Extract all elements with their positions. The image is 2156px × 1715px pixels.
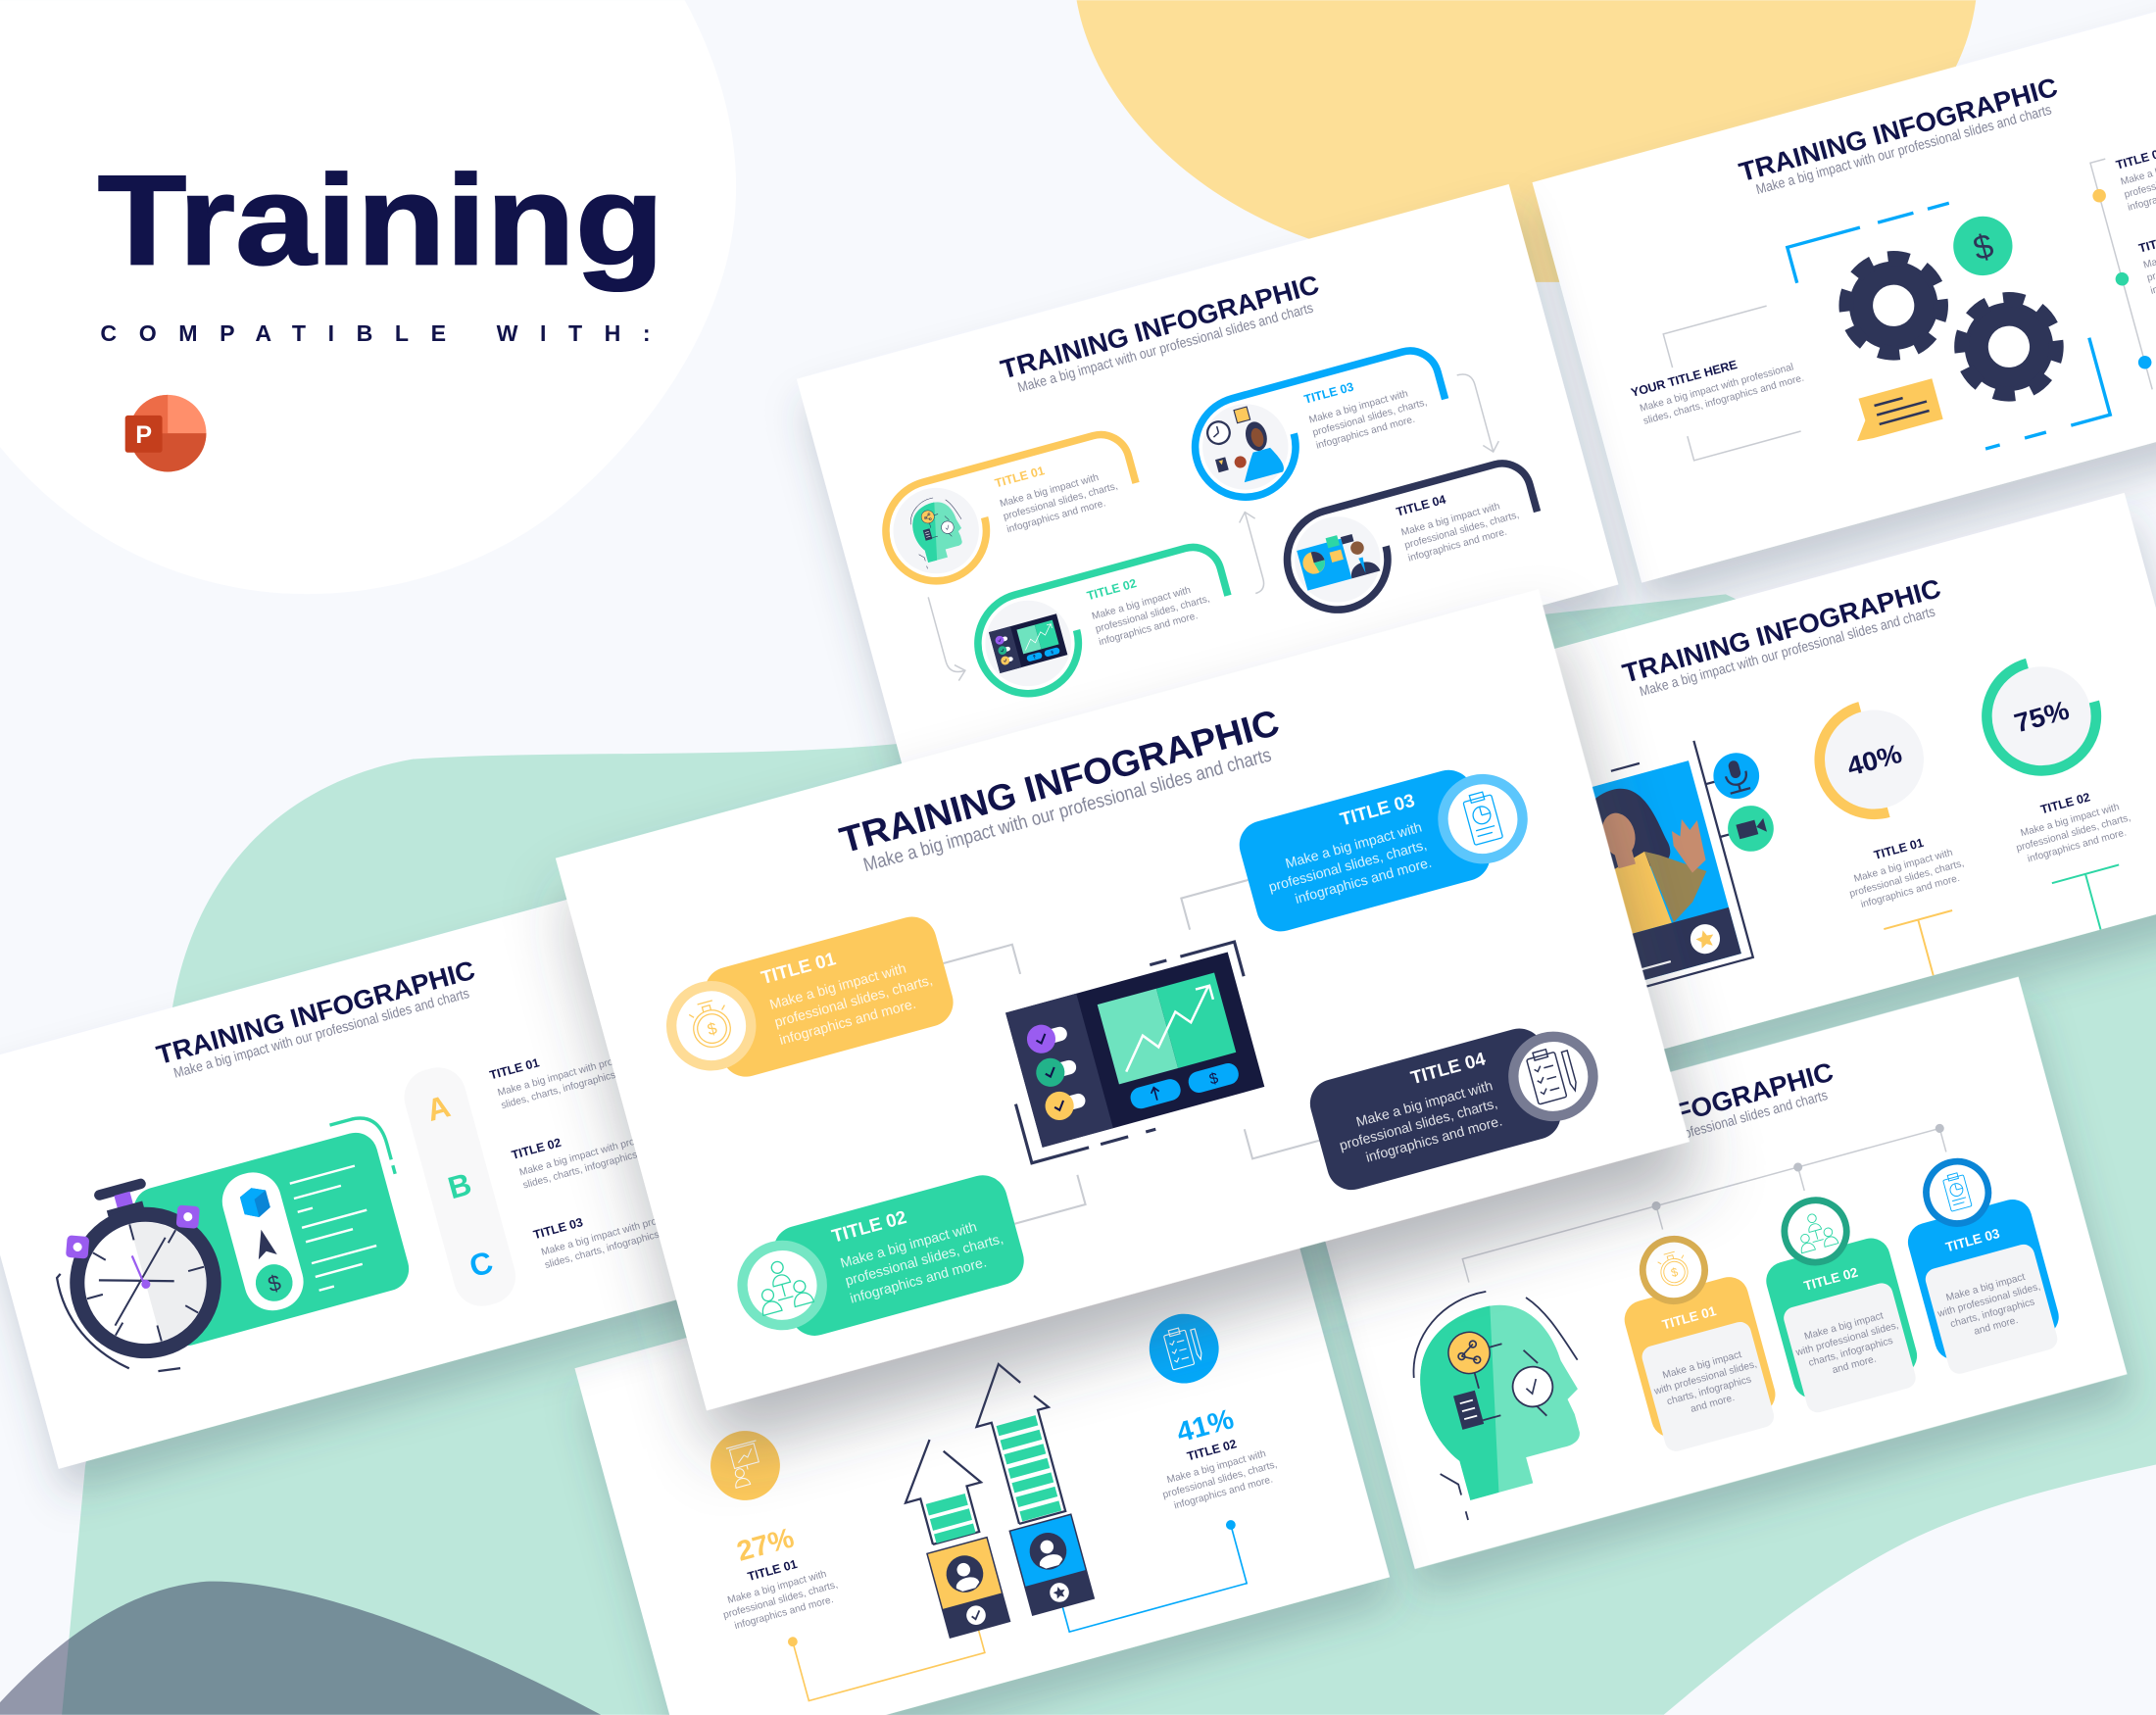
card: title 02: TITLE 02 [1802,1265,1859,1294]
text: title 02: infographics and more. [1173,1474,1274,1511]
slide title: TRAINING INFOGRAPHIC [1736,72,2061,187]
blob: slate overlap [0,1582,601,1715]
card: yellow person [927,1538,1009,1638]
ABC column: C [466,1244,497,1284]
icon: PowerPoint [125,395,206,471]
card: title 03: TITLE 03 [1944,1226,2002,1254]
donut: 75% [1975,649,2109,783]
slide subtitle: Make a big impact with our professional slides and charts [861,744,1274,876]
text: title 03: TITLE 03 [532,1215,584,1242]
text: your title here: slides, charts, infographics and more. [1642,372,1805,427]
pill: title 04: Make a big impact with [1354,1077,1494,1130]
text: title 02 [510,1104,685,1192]
slide subtitle: Make a big impact with our professional slides and charts [1754,102,2053,198]
step 02: Make a big impact with [1091,585,1193,622]
card: title 03 [1890,1146,2067,1378]
text: title 02: Make a big impact with professional [518,1126,674,1179]
text: title 01: TITLE 01 [746,1557,799,1584]
step 01: professional slides, charts, [1003,481,1119,522]
pill: title 02: TITLE 02 [829,1206,908,1247]
text: title 02: TITLE 02 [2039,790,2091,816]
card: title 01 [1606,1223,1784,1455]
step 01: TITLE 01 [994,464,1046,490]
text: title 02: professional slides, charts, [1161,1459,1279,1501]
card: title 03: and more. [1973,1315,2020,1338]
slide title: TRAINING INFOGRAPHIC [835,702,1284,860]
illustration: dashboard device [1005,953,1264,1148]
slide title: TRAINING INFOGRAPHIC [998,269,1322,385]
slide subtitle: Make a big impact with our professional slides and charts [1531,1088,1830,1184]
text: title 01 [713,1548,843,1634]
slide subtitle: Make a big impact with our professional slides and charts [172,986,471,1082]
text: title 02: slides, charts, infographics and more. [521,1137,685,1192]
card: title 01: charts, infographics [1666,1374,1752,1407]
pill: title 03: professional slides, charts, [1267,837,1428,895]
pill: title 02 [729,1170,1029,1351]
pill: title 04: TITLE 04 [1408,1048,1488,1088]
card: title 01: with professional slides, [1652,1359,1758,1397]
arrow: step 1 to 2 [928,593,967,683]
step 01 [874,428,1148,592]
pill: title 04: infographics and more. [1364,1112,1504,1165]
text: title 01: infographics and more. [733,1594,835,1632]
step 04: infographics and more. [1407,527,1508,564]
step 03: professional slides, charts, [1311,397,1429,439]
text: title 03: slides, charts, infographics and more. [544,1217,707,1271]
blob: yellow [1077,0,1976,282]
icon: dollar circle: $ [1970,227,1997,269]
card: title 01: TITLE 01 [1660,1303,1718,1332]
text: title 03 [532,1184,707,1272]
connector: yellow [787,1589,985,1702]
arrow: step 2 to 3 [1234,510,1274,593]
arrow: small [891,1430,994,1548]
panel: arrows slide [574,1175,1390,1715]
arrow: large [962,1354,1076,1528]
card: title 01: Make a big impact [1661,1349,1743,1381]
text: title 01: Make a big impact with [1853,848,1954,885]
arrow: step 3 to 4 [1457,369,1501,456]
text: your title here: Make a big impact with professional [1639,362,1794,415]
icon: left gear [1840,253,1946,359]
text: title 02: TITLE 02 [1186,1437,1238,1463]
text: title 02: infographics and more. [2027,827,2128,864]
icon: yellow circle [703,1423,788,1508]
connectors [944,880,1319,1224]
text: title 02 [2007,781,2135,867]
pill: title 01: Make a big impact with [767,960,907,1012]
text: title 01: Make a big impact with [726,1569,828,1606]
pill: title 04 [1304,1012,1606,1196]
panel: percentages slide [1412,493,2156,1088]
text: your title here [1630,342,1805,428]
ABC column: B [444,1165,475,1205]
step 02: professional slides, charts, [1095,594,1211,635]
panel: gears slide [1533,0,2156,583]
donut: 75%: 75% [2011,695,2073,738]
slide subtitle: Make a big impact with our professional slides and charts [1638,605,1936,700]
icon: dollar circle [1946,210,2019,282]
card: title 02 [1748,1184,1926,1417]
card: blue person [1009,1514,1094,1615]
card: title 03: with professional slides, [1936,1282,2041,1320]
panel: stopwatch slide [0,874,771,1469]
panel: main slide [556,589,1690,1410]
icon: stopwatch [37,1165,240,1394]
text: title 01 [488,1024,663,1112]
blob: mint [62,594,2156,1715]
pill: title 04: professional slides, charts, [1338,1095,1499,1153]
panel: four step slide [797,184,1618,779]
step 04: Make a big impact with [1400,501,1501,539]
text: title 01: professional slides, charts, [1848,858,1965,900]
text: title 01: professional slides, charts, [722,1580,839,1621]
pill: title 02: Make a big impact with [839,1218,978,1271]
connector: blue [1053,1519,1251,1632]
pill: title 03: Make a big impact with [1284,819,1424,871]
video frame with presenter [1516,741,1753,1005]
slide title: TRAINING INFOGRAPHIC [1619,572,1944,689]
icon: right gear [1956,294,2062,400]
text: title 01: infographics and more. [1860,873,1961,910]
gray bracket [1660,306,1801,461]
pill: title 01: TITLE 01 [759,948,838,988]
step 03: infographics and more. [1315,415,1416,452]
pill: title 01: infographics and more. [777,996,917,1048]
card: title 01: and more. [1690,1393,1736,1415]
text: your title here: YOUR TITLE HERE [1630,358,1739,400]
step 02 [966,541,1240,705]
step 03: Make a big impact with [1308,388,1409,426]
slide title: TRAINING INFOGRAPHIC [1511,1056,1837,1172]
connector: green [2052,864,2134,939]
text: title 03: Make a big impact with professional [540,1206,696,1258]
ABC column [398,1061,522,1312]
step 03: TITLE 03 [1302,380,1355,407]
heading: Training: Training [98,149,664,292]
connector line [1461,1123,1950,1283]
icon: camera [1714,801,1779,859]
icon: PowerPoint: P [135,421,152,449]
pill: title 02: infographics and more. [848,1253,988,1306]
step 04 [1276,457,1548,621]
card: title 03: charts, infographics [1949,1297,2036,1330]
step 01: Make a big impact with [999,472,1101,510]
pill: title 02: professional slides, charts, [844,1230,1004,1289]
step 01: infographics and more. [1005,498,1107,535]
illustration: head [1396,1273,1610,1524]
donut: 40% [1807,694,1936,827]
text: title 01: TITLE 01 [488,1055,541,1082]
step 03 [1184,344,1456,509]
card: title 02: and more. [1832,1354,1878,1376]
stat: 41%: 41% [1173,1403,1237,1449]
text: title 02: Make a big impact with [1166,1448,1267,1486]
card: title 02: with professional slides, [1794,1320,1900,1359]
icon: speech bubble [1846,378,1943,443]
pill: title 01: professional slides, charts, [772,972,934,1030]
icon: blue circle [1142,1306,1227,1392]
step 04: TITLE 04 [1395,492,1447,519]
slide subtitle: Make a big impact with our professional slides and charts [1016,301,1315,396]
stat: 27%: 27% [734,1522,798,1568]
pill: title 03 [1234,754,1536,937]
text: title 01: Make a big impact with professional [497,1047,653,1099]
text: title 01: slides, charts, infographics and more. [500,1057,663,1111]
pill: title 01 [659,911,958,1094]
connector: yellow [1884,910,1968,985]
text: title 02: Make a big impact with [2020,802,2121,839]
icon: microphone [1699,748,1764,807]
slide title: TRAINING INFOGRAPHIC [153,955,478,1070]
step 02: infographics and more. [1098,611,1199,648]
blob: white circle [0,0,736,594]
text: title 01: TITLE 01 [1873,836,1925,862]
blue dashed bracket [1788,176,2110,485]
green card: $ [266,1270,284,1297]
text: title 02 [1153,1428,1282,1514]
pill: title 03: TITLE 03 [1338,790,1417,829]
device brackets [990,942,1277,1163]
step 02: TITLE 02 [1086,576,1138,603]
timeline [2083,125,2156,391]
ABC column: A [423,1088,454,1128]
green card [125,1112,424,1350]
card: title 02: charts, infographics [1807,1336,1894,1369]
text: title 01 [1839,827,1969,912]
pill: title 03: infographics and more. [1294,855,1433,906]
step 04: professional slides, charts, [1403,510,1520,552]
donut: 40%: 40% [1843,738,1905,782]
panel: head slide [1306,977,2128,1569]
text: title 02: TITLE 02 [510,1136,563,1162]
card: title 02: Make a big impact [1803,1310,1885,1343]
card: title 03: Make a big impact [1945,1272,2027,1303]
subheading: compatible with: COMPATIBLE WITH: [100,320,651,346]
text: title 02: professional slides, charts, [2015,812,2132,855]
